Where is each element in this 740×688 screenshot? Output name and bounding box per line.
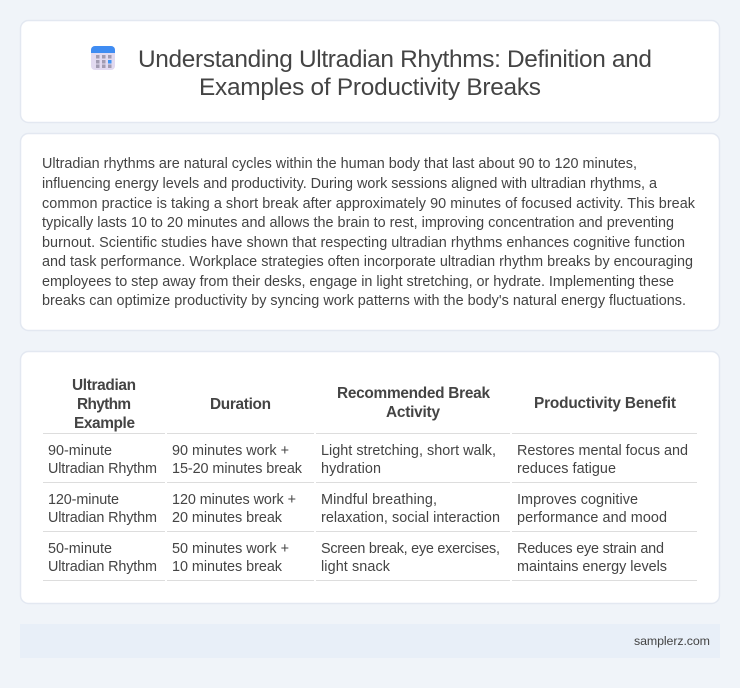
table row: 90-minute: reduces fatigue [517, 461, 616, 477]
footer bar [20, 624, 720, 658]
table header row: Recommended Break [337, 385, 490, 402]
table row: 50-minute: 50 minutes work + [172, 541, 289, 557]
table row: 90-minute: Restores mental focus and [517, 443, 688, 459]
table row: 90-minute: 90 minutes work + [172, 443, 289, 459]
table row: 90-minute: 90-minute [48, 443, 112, 459]
table header row: Ultradian [72, 377, 136, 394]
table row: 50-minute: Reduces eye strain and [517, 541, 664, 557]
text block: definition: burnout. Scientific studies have shown that respecting ultradian rhythms enhances cognitive function [42, 235, 685, 251]
text block: definition: Ultradian rhythms are natural cycles within the human body that last about 90 to 120 minutes, [42, 156, 637, 172]
text block: definition: influencing energy levels and productivity. During work sessions aligned with ultradian rhythms, a [42, 176, 657, 192]
table row: 50-minute: 50-minute [48, 541, 112, 557]
table row: 50-minute: 10 minutes break [172, 559, 283, 575]
table row: 50-minute: maintains energy levels [517, 559, 667, 575]
table header row: Rhythm [77, 396, 131, 413]
table row: 120-minute: 20 minutes break [172, 510, 283, 526]
table row: 120-minute: Mindful breathing, [321, 492, 437, 508]
panel: description paragraph [20, 134, 720, 330]
title [138, 46, 652, 101]
table row: 120-minute: Ultradian Rhythm [48, 510, 157, 526]
table row: 90-minute: 15-20 minutes break [172, 461, 303, 477]
table row: 50-minute [43, 531, 697, 581]
table header row: Example [74, 415, 135, 432]
table row: 50-minute: Screen break, eye exercises, [321, 541, 500, 557]
table row: 90-minute: hydration [321, 461, 381, 477]
table row: 120-minute: 120-minute [48, 492, 119, 508]
text block: definition: employees to step away from their desks, engage in light stretching, or hydrate. Implementing these [42, 274, 674, 290]
table row: 120-minute [43, 482, 697, 526]
icon: calendar [91, 46, 115, 70]
table row: 90-minute: Light stretching, short walk, [321, 443, 496, 459]
table header row: Productivity Benefit [534, 395, 676, 412]
table header row: Duration [210, 396, 271, 413]
table header row: Activity [386, 404, 440, 421]
table row: 120-minute: performance and mood [517, 510, 667, 526]
panel: title header [20, 20, 720, 122]
title: Understanding Ultradian Rhythms: Definition and [138, 46, 652, 73]
footer text: samplerz.com [634, 634, 710, 648]
text block: definition: breaks can optimize productivity by syncing work patterns with the body's natural energy fluctuations. [42, 293, 686, 309]
table row: 120-minute: 120 minutes work + [172, 492, 296, 508]
text block: definition: typically lasts 10 to 20 minutes and allows the brain to rest, improving concentration and preventing [42, 215, 674, 231]
table row: 120-minute: Improves cognitive [517, 492, 638, 508]
table row: 120-minute: relaxation, social interaction [321, 510, 500, 526]
text block: definition: common practice is taking a short break after approximately 90 minutes of focused activity. This break [42, 196, 696, 212]
text block: definition: and task performance. Workplace strategies often incorporate ultradian rhythm breaks by encouraging [42, 254, 693, 270]
table row: 50-minute: Ultradian Rhythm [48, 559, 157, 575]
text block: definition [42, 156, 696, 309]
panel: rhythm table [20, 352, 720, 604]
table header row [72, 377, 676, 432]
title: Examples of Productivity Breaks [199, 74, 541, 101]
table row: 50-minute: light snack [321, 559, 391, 575]
table row: 90-minute: Ultradian Rhythm [48, 461, 157, 477]
table row: 90-minute [43, 433, 697, 477]
